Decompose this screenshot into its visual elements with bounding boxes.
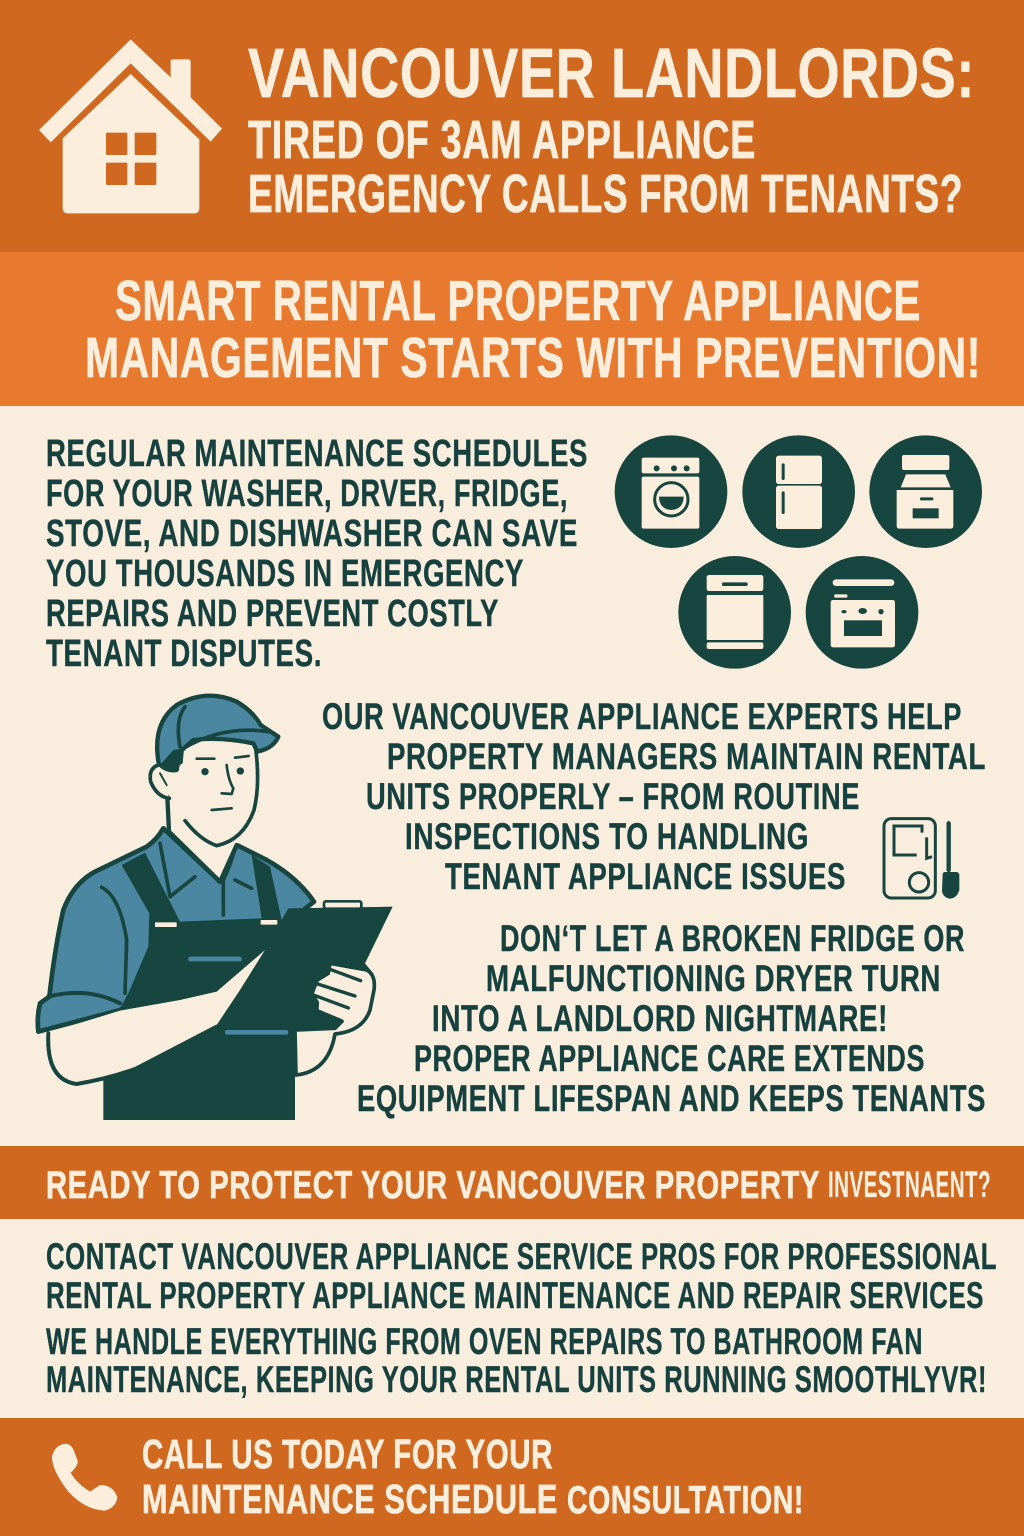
illustration: technician with clipboard <box>38 696 393 1120</box>
subtitle banner <box>0 252 1024 406</box>
forearm <box>48 950 265 1084</box>
text block: contact <box>46 1236 997 1400</box>
text block: regular maintenance: REPAIRS AND PREVENT COSTLY <box>46 593 499 635</box>
icon: inspection tool <box>884 819 959 899</box>
title: TIRED OF 3AM APPLIANCE <box>248 110 756 170</box>
text block: experts <box>322 696 986 897</box>
text block: broken fridge <box>357 918 986 1119</box>
hand <box>295 963 374 1075</box>
icon: storage appliance <box>869 435 982 548</box>
overalls <box>103 853 393 1120</box>
call to action text: CALL US TODAY FOR YOUR <box>142 1431 553 1477</box>
text block: regular maintenance: FOR YOUR WASHER, DRVER, FRIDGE, <box>46 473 568 515</box>
overall buttons <box>155 922 177 927</box>
icon: fridge <box>742 435 855 548</box>
appliance icons <box>615 435 982 669</box>
call to action text: CONSULTATION! <box>567 1479 804 1522</box>
text block: regular maintenance: YOU THOUSANDS IN EMERGENCY <box>46 553 524 595</box>
collar <box>160 843 252 915</box>
cap <box>157 696 278 770</box>
call to action text <box>142 1431 804 1522</box>
text block: regular maintenance: REGULAR MAINTENANCE SCHEDULES <box>46 433 588 475</box>
text block: experts: INSPECTIONS TO HANDLING <box>405 816 809 857</box>
icon: phone <box>52 1444 117 1511</box>
shirt <box>38 828 314 1032</box>
icon: washer <box>615 435 727 548</box>
text block: regular maintenance: STOVE, AND DISHWASHER CAN SAVE <box>46 513 578 555</box>
text block: regular maintenance: TENANT DISPUTES. <box>46 633 322 675</box>
pocket lines <box>188 957 242 961</box>
icon: stove <box>806 556 918 669</box>
title <box>248 34 975 224</box>
ear <box>150 765 169 798</box>
footer banner <box>0 1418 1024 1536</box>
text block: broken fridge: INTO A LANDLORD NIGHTMARE! <box>432 998 888 1039</box>
text block: regular maintenance <box>46 433 588 675</box>
facial features <box>197 756 249 810</box>
text block: experts: TENANT APPLIANCE ISSUES <box>445 856 846 897</box>
sleeve fold <box>102 887 127 993</box>
clipboard clip <box>324 901 361 909</box>
call-to-action banner <box>0 1146 1024 1219</box>
icon: dishwasher <box>678 556 791 669</box>
text block: experts: UNITS PROPERLY – FROM ROUTINE <box>366 776 860 817</box>
neck and face <box>167 747 257 882</box>
call to action text: MAINTENANCE SCHEDULE <box>142 1476 558 1522</box>
icon: house <box>39 39 222 213</box>
header banner <box>0 0 1024 252</box>
